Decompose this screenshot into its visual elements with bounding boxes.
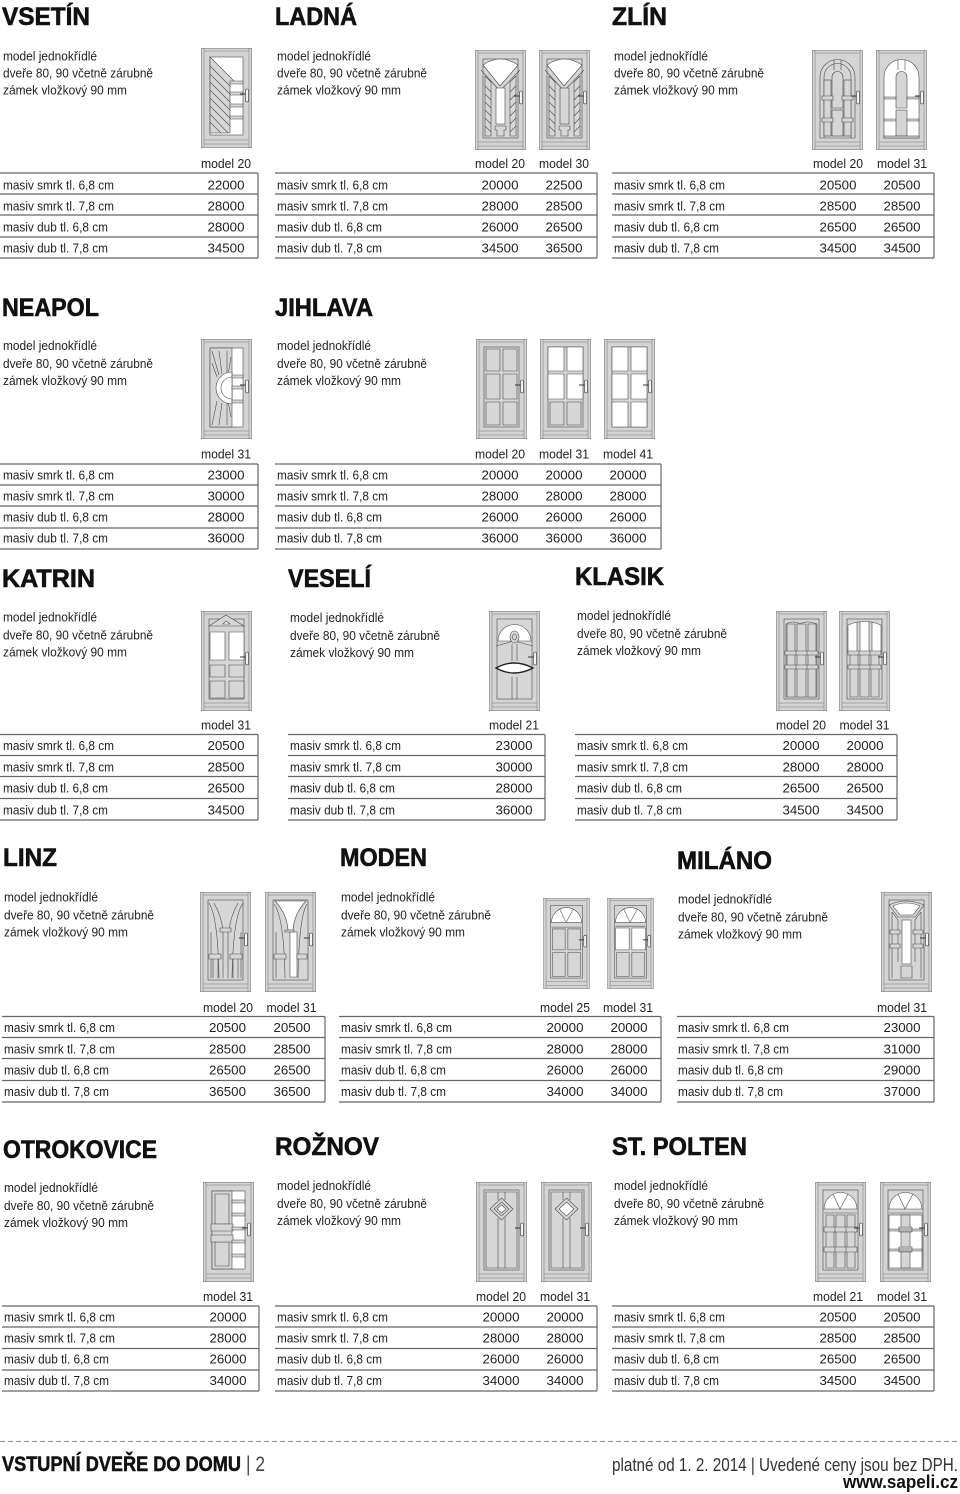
price table: Linz: model 31	[266, 1000, 316, 1015]
price table: Linz: 20500	[209, 1020, 246, 1035]
price table: Zlín: 34500	[884, 241, 920, 256]
price table: Ladná: 28000	[482, 199, 518, 214]
price table: Zlín: model 20	[813, 156, 863, 171]
description: Jihlava: model jednokřídlé	[277, 338, 371, 353]
heading: Linz: LINZ	[3, 844, 57, 872]
price table: Veselí: masiv smrk tl. 7,8 cm	[290, 760, 401, 774]
description: Vsetín: model jednokřídlé	[3, 48, 97, 64]
price table: Klasik: 28000	[783, 760, 819, 774]
price table: Moden: 20000	[547, 1020, 583, 1035]
description: Vsetín: zámek vložkový 90 mm	[3, 82, 127, 98]
description: Moden	[341, 890, 491, 940]
price table: Ladná: 20000	[482, 178, 518, 192]
price table: Klasik: masiv smrk tl. 7,8 cm	[577, 760, 688, 774]
price table: Linz: 20500	[274, 1020, 310, 1035]
price table: Moden: 26000	[611, 1062, 647, 1078]
price table: Jihlava: 36000	[610, 531, 646, 546]
price table: St. Polten: masiv dub tl. 6,8 cm	[614, 1352, 719, 1366]
price table: St. Polten: masiv dub tl. 7,8 cm	[614, 1373, 719, 1388]
price table: Miláno: 29000	[884, 1062, 920, 1078]
price table: Rožnov: masiv smrk tl. 7,8 cm	[277, 1330, 388, 1346]
description: St. Polten: model jednokřídlé	[614, 1178, 708, 1193]
price table: Rožnov: model 20	[476, 1289, 526, 1304]
price table: Katrin: 26500	[208, 780, 244, 796]
icon: door model 21	[815, 1182, 866, 1282]
heading: Zlín: ZLÍN	[612, 2, 667, 31]
description: Otrokovice	[4, 1180, 154, 1230]
price table: Moden: 34000	[547, 1084, 583, 1099]
icon: door model 31	[608, 898, 653, 989]
heading: Moden: MODEN	[340, 844, 427, 872]
price table: Jihlava: 26000	[610, 510, 646, 525]
price table: Katrin: masiv dub tl. 6,8 cm	[3, 780, 108, 796]
price table: Linz: 36500	[274, 1084, 310, 1099]
icon: door model 20	[475, 50, 526, 150]
price table: St. Polten: masiv smrk tl. 7,8 cm	[614, 1330, 725, 1346]
price table: Vsetín: 28000	[208, 199, 244, 214]
panel: Rožnov	[275, 1131, 597, 1391]
price table: Jihlava: masiv smrk tl. 6,8 cm	[277, 468, 388, 482]
price table: Veselí: model 21	[489, 718, 539, 732]
description: Jihlava	[277, 338, 427, 388]
price table: Zlín: 28500	[820, 199, 856, 214]
price table: Zlín: 20500	[820, 178, 856, 192]
price table: Klasik: 28000	[847, 760, 883, 774]
price table: Moden: masiv dub tl. 6,8 cm	[341, 1062, 446, 1078]
price table: Ladná: model 20	[475, 156, 525, 171]
description: Jihlava: dveře 80, 90 včetně zárubně	[277, 356, 427, 371]
description: Neapol	[3, 338, 153, 388]
price table: Vsetín: 22000	[208, 178, 244, 192]
price table: Otrokovice: masiv dub tl. 6,8 cm	[4, 1352, 109, 1366]
footer title: VSTUPNÍ DVEŘE DO DOMU	[2, 1452, 241, 1476]
icon: door model 20	[200, 892, 251, 992]
price table: Moden: masiv smrk tl. 6,8 cm	[341, 1020, 452, 1035]
price table: Katrin: 34500	[208, 802, 244, 818]
price table: Klasik: 34500	[847, 802, 883, 818]
price table: Klasik: masiv dub tl. 6,8 cm	[577, 780, 682, 796]
description: St. Polten: zámek vložkový 90 mm	[614, 1213, 738, 1228]
description: St. Polten: dveře 80, 90 včetně zárubně	[614, 1196, 764, 1211]
price table: Klasik: model 20	[776, 718, 826, 732]
description: Ladná: zámek vložkový 90 mm	[277, 82, 401, 98]
price table: Neapol: masiv dub tl. 7,8 cm	[3, 531, 108, 546]
price table: Jihlava: 28000	[482, 489, 518, 504]
icon: door model 31	[839, 611, 890, 711]
price table: St. Polten: 26500	[884, 1352, 920, 1366]
price table: Ladná: masiv smrk tl. 6,8 cm	[277, 178, 388, 192]
price table: Moden: 20000	[611, 1020, 647, 1035]
price table: Veselí	[288, 718, 545, 820]
description: Katrin: zámek vložkový 90 mm	[3, 644, 127, 660]
price table: Linz: masiv dub tl. 7,8 cm	[4, 1084, 109, 1099]
price table: Vsetín: masiv dub tl. 6,8 cm	[3, 220, 108, 235]
panel: Ladná	[275, 2, 597, 258]
price table: Ladná	[275, 156, 597, 258]
description: Klasik: model jednokřídlé	[577, 608, 671, 623]
price table: St. Polten: 20500	[884, 1310, 920, 1324]
description: Veselí: model jednokřídlé	[290, 610, 384, 625]
heading: Veselí: VESELÍ	[288, 564, 372, 593]
panel: Vsetín	[0, 2, 258, 258]
price table: Rožnov: 34000	[483, 1373, 519, 1388]
price table: Katrin: masiv smrk tl. 6,8 cm	[3, 738, 114, 753]
icon: door model 31	[541, 1182, 592, 1282]
price table: Rožnov: 28000	[547, 1330, 583, 1346]
price table: Moden: model 25	[540, 1000, 590, 1015]
panel: Katrin	[0, 565, 258, 820]
price table: Zlín: model 31	[877, 156, 927, 171]
description: Katrin: model jednokřídlé	[3, 610, 97, 624]
footer	[2, 1452, 958, 1492]
price table: Rožnov: masiv dub tl. 7,8 cm	[277, 1373, 382, 1388]
icon: door model 20	[476, 339, 527, 439]
price table: Zlín	[612, 156, 934, 258]
price table: Neapol: masiv dub tl. 6,8 cm	[3, 510, 108, 525]
description: Klasik: zámek vložkový 90 mm	[577, 643, 701, 658]
price table: Ladná: 26500	[546, 220, 582, 235]
description: Otrokovice: zámek vložkový 90 mm	[4, 1215, 128, 1230]
price table: Miláno: masiv dub tl. 6,8 cm	[678, 1062, 783, 1078]
price table: Vsetín: 28000	[208, 220, 244, 235]
price table: Jihlava: 28000	[546, 489, 582, 504]
price table: Moden	[339, 1000, 661, 1102]
heading: Jihlava: JIHLAVA	[275, 294, 373, 322]
price table: Klasik: 26500	[847, 780, 883, 796]
price table: Ladná: 28500	[546, 199, 582, 214]
icon: door model 20	[776, 611, 827, 711]
price table: Zlín: masiv smrk tl. 7,8 cm	[614, 199, 725, 214]
icon: door model 31	[876, 50, 927, 150]
description: Ladná: dveře 80, 90 včetně zárubně	[277, 66, 427, 80]
price table: Klasik: 26500	[783, 780, 819, 796]
price table: Rožnov: 26000	[547, 1352, 583, 1366]
price table: Jihlava: 26000	[482, 510, 518, 525]
icon: door model 20	[201, 48, 252, 148]
icon: door model 30	[539, 50, 590, 150]
price table: Moden: 28000	[611, 1042, 647, 1056]
price table: Otrokovice: masiv smrk tl. 6,8 cm	[4, 1310, 115, 1324]
icon: door model 31	[203, 1182, 254, 1282]
icon: door model 31	[201, 611, 252, 711]
price table: Jihlava: model 41	[603, 446, 653, 462]
price table: Moden: model 31	[603, 1000, 653, 1015]
price table: Vsetín: 34500	[208, 241, 244, 256]
price table: Neapol: 23000	[208, 468, 244, 482]
price table: Linz: 36500	[209, 1084, 246, 1099]
description: Klasik: dveře 80, 90 včetně zárubně	[577, 626, 727, 641]
description: Miláno: dveře 80, 90 včetně zárubně	[678, 910, 828, 924]
price table: Jihlava: 20000	[546, 468, 582, 482]
heading: Miláno: MILÁNO	[677, 846, 772, 875]
description: Linz	[4, 890, 154, 940]
heading: Klasik: KLASIK	[575, 563, 664, 591]
panel: Otrokovice	[2, 1136, 259, 1391]
panel: Zlín	[612, 2, 934, 258]
panel: Veselí	[288, 564, 545, 820]
price table: St. Polten: 28500	[884, 1330, 920, 1346]
price table: St. Polten: model 21	[813, 1289, 863, 1304]
price table: Klasik: model 31	[840, 718, 890, 732]
price table: Moden: masiv dub tl. 7,8 cm	[341, 1084, 446, 1099]
icon: door model 20	[812, 50, 863, 150]
price table: Zlín: 26500	[884, 220, 920, 235]
price table: Katrin: 20500	[208, 738, 244, 753]
description: Rožnov: zámek vložkový 90 mm	[277, 1213, 401, 1228]
panel: Jihlava	[275, 294, 661, 549]
price table: St. Polten: masiv smrk tl. 6,8 cm	[614, 1310, 725, 1324]
price table: Neapol: model 31	[201, 446, 251, 462]
price table: Zlín: 34500	[820, 241, 856, 256]
description: Neapol: dveře 80, 90 včetně zárubně	[3, 356, 153, 371]
icon: door model 31	[201, 339, 252, 439]
price table: Rožnov: 20000	[547, 1310, 583, 1324]
description: Jihlava: zámek vložkový 90 mm	[277, 373, 401, 388]
description: Rožnov: dveře 80, 90 včetně zárubně	[277, 1196, 427, 1211]
price table: Jihlava: 36000	[482, 531, 518, 546]
price table: St. Polten: 34500	[884, 1373, 920, 1388]
price table: Zlín: 28500	[884, 199, 920, 214]
price table: Neapol: masiv smrk tl. 6,8 cm	[3, 468, 114, 482]
price table: Katrin: model 31	[201, 718, 251, 732]
price table: Linz: masiv smrk tl. 7,8 cm	[4, 1042, 115, 1056]
description: Otrokovice: dveře 80, 90 včetně zárubně	[4, 1198, 154, 1213]
price table: Vsetín: masiv smrk tl. 7,8 cm	[3, 199, 114, 214]
icon: door model 25	[544, 898, 589, 989]
icon: door model 31	[265, 892, 316, 992]
description: Vsetín: dveře 80, 90 včetně zárubně	[3, 66, 153, 80]
description: Moden: zámek vložkový 90 mm	[341, 924, 465, 940]
price table: Zlín: masiv dub tl. 7,8 cm	[614, 241, 719, 256]
description: Zlín: model jednokřídlé	[614, 48, 708, 64]
price table: Katrin: masiv smrk tl. 7,8 cm	[3, 760, 114, 774]
page number: | 2	[246, 1453, 265, 1476]
price table: Vsetín	[0, 156, 258, 258]
description: Linz: model jednokřídlé	[4, 890, 98, 904]
description: Moden: model jednokřídlé	[341, 890, 435, 904]
icon: door model 31	[881, 892, 932, 992]
price table: Zlín: 26500	[820, 220, 856, 235]
description: Miláno	[678, 892, 828, 942]
price table: Neapol: masiv smrk tl. 7,8 cm	[3, 489, 114, 504]
price table: Rožnov: 20000	[483, 1310, 519, 1324]
price table: Jihlava: masiv smrk tl. 7,8 cm	[277, 489, 388, 504]
price table: Linz: 28500	[274, 1042, 310, 1056]
price table: Neapol	[0, 446, 258, 549]
price table: Linz: masiv dub tl. 6,8 cm	[4, 1062, 109, 1078]
description: Linz: dveře 80, 90 včetně zárubně	[4, 908, 154, 922]
price table: Jihlava: 28000	[610, 489, 646, 504]
price table: Klasik: 20000	[783, 738, 819, 753]
heading: Otrokovice: OTROKOVICE	[3, 1136, 157, 1164]
description: Vsetín	[3, 48, 153, 98]
price table: Jihlava: 26000	[546, 510, 582, 525]
icon: door model 41	[604, 339, 655, 439]
price table: St. Polten: 28500	[820, 1330, 856, 1346]
price table: Otrokovice	[2, 1289, 259, 1391]
price table: Neapol: 30000	[208, 489, 244, 504]
price table: Vsetín: model 20	[201, 156, 251, 171]
price table: Jihlava: model 31	[539, 446, 589, 462]
price table: Jihlava: masiv dub tl. 7,8 cm	[277, 531, 382, 546]
price table: Ladná: masiv dub tl. 6,8 cm	[277, 220, 382, 235]
description: Rožnov: model jednokřídlé	[277, 1178, 371, 1193]
price table: Ladná: model 30	[539, 156, 589, 171]
price table: Moden: 28000	[547, 1042, 583, 1056]
price table: Veselí: 36000	[496, 802, 532, 818]
icon: door model 20	[476, 1182, 527, 1282]
price table: Jihlava	[275, 446, 661, 549]
panel: Linz	[2, 844, 325, 1102]
description: Zlín: zámek vložkový 90 mm	[614, 82, 738, 98]
price table: Jihlava: masiv dub tl. 6,8 cm	[277, 510, 382, 525]
price table: St. Polten: 26500	[820, 1352, 856, 1366]
description: Katrin: dveře 80, 90 včetně zárubně	[3, 628, 153, 642]
price table: Miláno: 31000	[884, 1042, 920, 1056]
price table: Neapol: 28000	[208, 510, 244, 525]
price table: Otrokovice: 20000	[210, 1310, 246, 1324]
price table: Veselí: masiv smrk tl. 6,8 cm	[290, 738, 401, 753]
price table: Rožnov: 26000	[483, 1352, 519, 1366]
price table: Otrokovice: 26000	[210, 1352, 246, 1366]
price table: Moden: masiv smrk tl. 7,8 cm	[341, 1042, 452, 1056]
price table: Otrokovice: masiv dub tl. 7,8 cm	[4, 1373, 109, 1388]
panel: Klasik	[575, 563, 897, 820]
description: Rožnov	[277, 1178, 427, 1228]
price table: Klasik: 34500	[783, 802, 819, 818]
price table: Miláno: 37000	[884, 1084, 920, 1099]
price table: St. Polten: 20500	[820, 1310, 856, 1324]
heading: Neapol: NEAPOL	[2, 294, 99, 322]
description: Veselí: dveře 80, 90 včetně zárubně	[290, 628, 440, 643]
price table: Rožnov: 34000	[547, 1373, 583, 1388]
price table: Otrokovice: masiv smrk tl. 7,8 cm	[4, 1330, 115, 1346]
panel: St. Polten	[612, 1133, 934, 1391]
heading: Vsetín: VSETÍN	[2, 2, 90, 31]
price table: Klasik: masiv dub tl. 7,8 cm	[577, 802, 682, 818]
price table: Neapol: 36000	[208, 531, 244, 546]
price table: Otrokovice: 28000	[210, 1330, 246, 1346]
price table: Katrin: masiv dub tl. 7,8 cm	[3, 802, 108, 818]
description: Otrokovice: model jednokřídlé	[4, 1180, 98, 1195]
icon: door model 31	[880, 1182, 931, 1282]
price table: Veselí: 30000	[496, 760, 532, 774]
price table: Linz: masiv smrk tl. 6,8 cm	[4, 1020, 115, 1035]
price table: Zlín: masiv smrk tl. 6,8 cm	[614, 178, 725, 192]
price table: Ladná: 36500	[546, 241, 582, 256]
price table: Rožnov: masiv dub tl. 6,8 cm	[277, 1352, 382, 1366]
price table: Zlín: 20500	[884, 178, 920, 192]
description: Miláno: model jednokřídlé	[678, 892, 772, 906]
description: Neapol: model jednokřídlé	[3, 338, 97, 353]
price table: Veselí: masiv dub tl. 7,8 cm	[290, 802, 395, 818]
price table: Linz: 26500	[209, 1062, 246, 1078]
price table: Ladná: 34500	[482, 241, 518, 256]
price table: Jihlava: model 20	[475, 446, 525, 462]
description: Ladná	[277, 48, 427, 98]
panel: Moden	[339, 844, 661, 1102]
price table: Miláno: model 31	[877, 1000, 927, 1015]
price table: Moden: 26000	[547, 1062, 583, 1078]
panel: Miláno	[677, 846, 934, 1102]
heading: Katrin: KATRIN	[2, 565, 95, 593]
icon: door model 21	[489, 611, 540, 711]
price table: St. Polten: model 31	[877, 1289, 927, 1304]
price table: Linz: model 20	[203, 1000, 253, 1015]
icon: door model 31	[540, 339, 591, 439]
price table: Katrin	[0, 718, 258, 820]
price table: Linz: 26500	[274, 1062, 310, 1078]
description: St. Polten	[614, 1178, 764, 1228]
description: Katrin	[3, 610, 153, 660]
price table: Vsetín: masiv smrk tl. 6,8 cm	[3, 178, 114, 192]
price table: Rožnov: masiv smrk tl. 6,8 cm	[277, 1310, 388, 1324]
price table: St. Polten: 34500	[820, 1373, 856, 1388]
price table: Ladná: masiv dub tl. 7,8 cm	[277, 241, 382, 256]
panel: Neapol	[0, 294, 258, 549]
price table: Jihlava: 36000	[546, 531, 582, 546]
price table: Jihlava: 20000	[482, 468, 518, 482]
price table: Linz: 28500	[209, 1042, 246, 1056]
description: Veselí	[290, 610, 440, 660]
price table: Ladná: 22500	[546, 178, 582, 192]
price table: Klasik: masiv smrk tl. 6,8 cm	[577, 738, 688, 753]
price table: Miláno: masiv dub tl. 7,8 cm	[678, 1084, 783, 1099]
price table: Klasik: 20000	[847, 738, 883, 753]
price table: Otrokovice: model 31	[203, 1289, 253, 1304]
heading: Rožnov: ROŽNOV	[275, 1131, 379, 1161]
price table: Miláno	[677, 1000, 934, 1102]
price table: Rožnov: 28000	[483, 1330, 519, 1346]
price table: St. Polten	[612, 1289, 934, 1391]
price table: Zlín: masiv dub tl. 6,8 cm	[614, 220, 719, 235]
price table: Moden: 34000	[611, 1084, 647, 1099]
price table: Klasik	[575, 718, 897, 820]
price table: Veselí: 28000	[496, 780, 532, 796]
description: Veselí: zámek vložkový 90 mm	[290, 645, 414, 660]
description: Neapol: zámek vložkový 90 mm	[3, 373, 127, 388]
price table: Veselí: masiv dub tl. 6,8 cm	[290, 780, 395, 796]
price table: Rožnov	[275, 1289, 597, 1391]
description: Miláno: zámek vložkový 90 mm	[678, 926, 802, 942]
price table: Miláno: masiv smrk tl. 6,8 cm	[678, 1020, 789, 1035]
description: Klasik	[577, 608, 727, 658]
heading: Ladná: LADNÁ	[275, 2, 357, 31]
description: Zlín: dveře 80, 90 včetně zárubně	[614, 66, 764, 80]
price table: Rožnov: model 31	[540, 1289, 590, 1304]
description: Moden: dveře 80, 90 včetně zárubně	[341, 908, 491, 922]
price table: Otrokovice: 34000	[210, 1373, 246, 1388]
price table: Ladná: masiv smrk tl. 7,8 cm	[277, 199, 388, 214]
price table: Linz	[2, 1000, 325, 1102]
price table: Vsetín: masiv dub tl. 7,8 cm	[3, 241, 108, 256]
price table: Miláno: 23000	[884, 1020, 920, 1035]
price table: Ladná: 26000	[482, 220, 518, 235]
price table: Katrin: 28500	[208, 760, 244, 774]
description: Zlín	[614, 48, 764, 98]
price table: Veselí: 23000	[496, 738, 532, 753]
price table: Miláno: masiv smrk tl. 7,8 cm	[678, 1042, 789, 1056]
description: Linz: zámek vložkový 90 mm	[4, 924, 128, 940]
description: Ladná: model jednokřídlé	[277, 48, 371, 64]
heading: St. Polten: ST. POLTEN	[612, 1133, 747, 1161]
price table: Jihlava: 20000	[610, 468, 646, 482]
